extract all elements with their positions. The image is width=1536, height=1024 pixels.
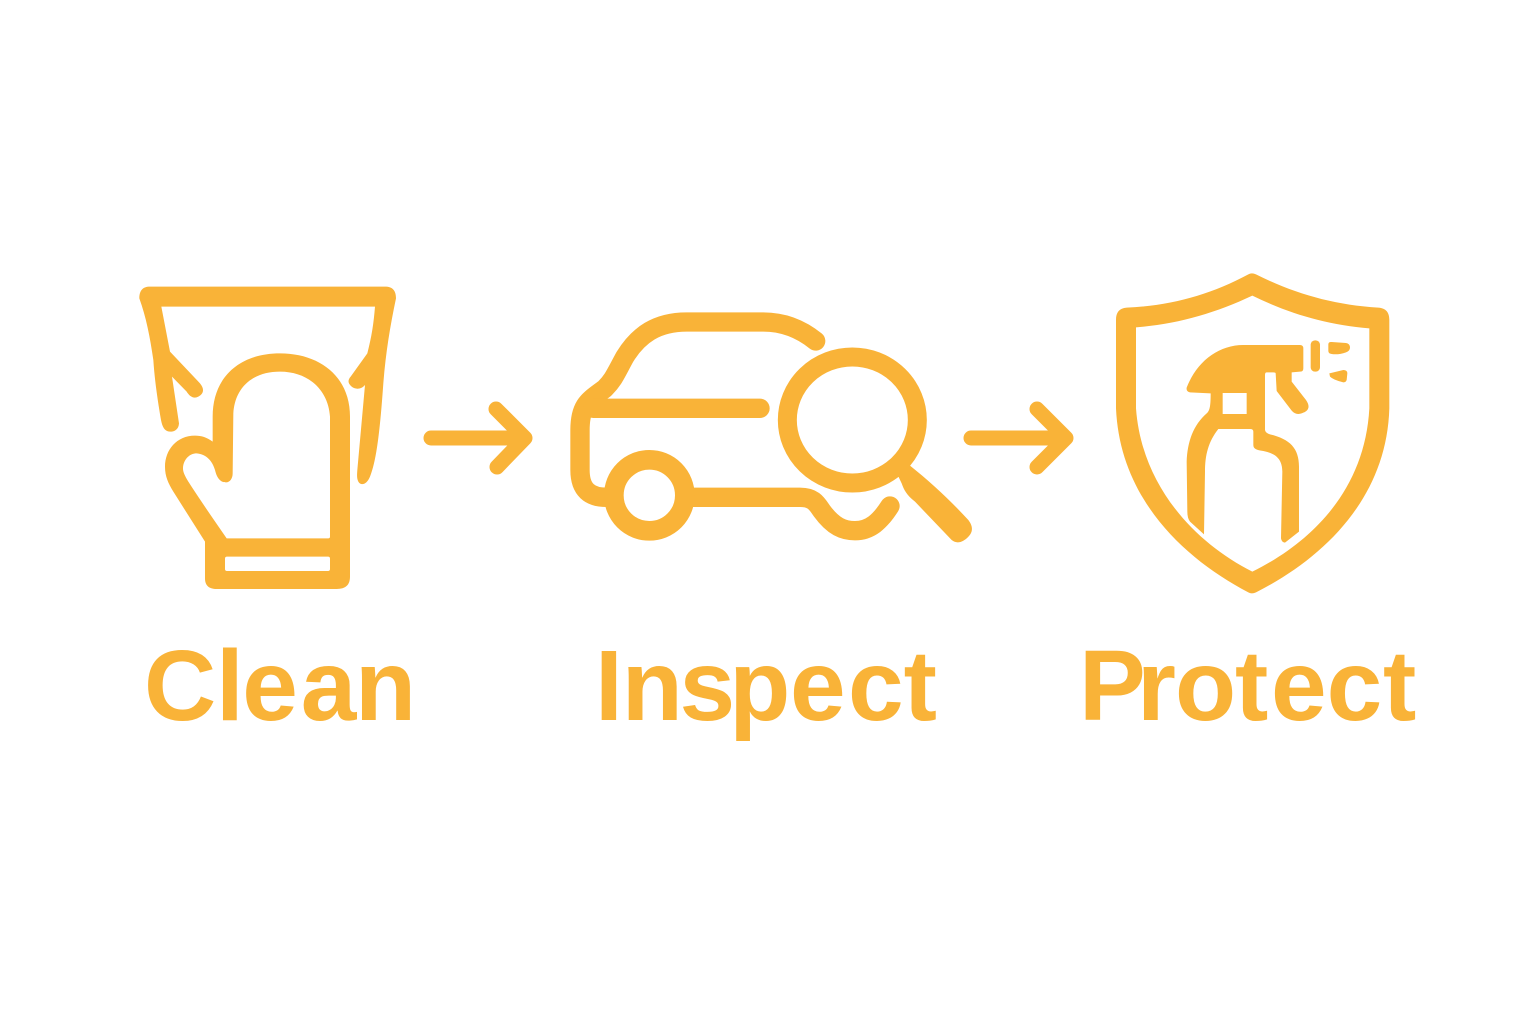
spray droplets: [1311, 340, 1350, 382]
arrow: clean to inspect: [431, 409, 525, 467]
label: Protect: Protect: [1079, 630, 1416, 742]
arrow: inspect to protect: [971, 409, 1066, 467]
label: Inspect: Inspect: [595, 630, 937, 742]
icon: car with magnifying glass: [580, 322, 972, 542]
icon: towel and oven-mitt glove: [139, 287, 396, 589]
towel outline: [139, 287, 396, 484]
icon: shield with spray bottle: [1116, 273, 1389, 593]
spray bottle: [1187, 345, 1309, 543]
shield: [1116, 273, 1389, 593]
wheel: [614, 460, 685, 531]
car body: [580, 322, 890, 531]
mitt: [165, 353, 350, 589]
label: Clean: Clean: [144, 630, 416, 742]
magnifying glass: [787, 357, 972, 542]
